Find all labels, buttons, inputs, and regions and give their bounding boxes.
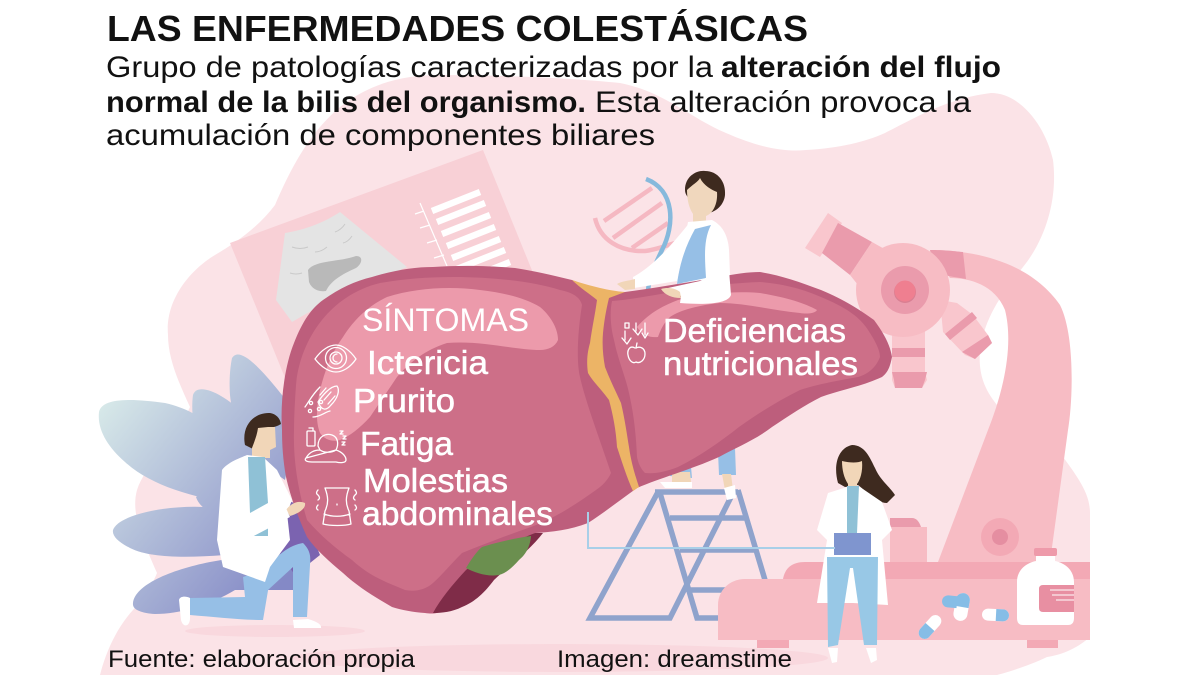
ultrasound scan [276,212,407,322]
symptom: deficiencias nutricionales [622,312,858,382]
paper sheet [230,150,540,390]
objective lenses [892,300,992,388]
symptom: deficiencias nutricionales: nutricionales [663,345,858,382]
symptom: ictericia: Ictericia [367,344,489,381]
shoes [828,648,877,663]
symptom: fatiga [305,425,454,463]
shirt [677,225,711,284]
doctor standing on ladder: body [660,448,736,500]
hand left [617,279,635,290]
face [687,178,717,226]
icon: tired person [305,428,346,463]
background blob [100,75,1090,675]
pill vertical [952,592,971,622]
symptom: molestias abdominales: abdominales [362,495,553,532]
bottle cap [1034,548,1057,556]
pill horizontal [982,608,1009,622]
left lobe [294,277,611,591]
icon: itchy hands [305,386,338,417]
icon: eye [315,345,356,372]
shoes [179,597,321,628]
leaves [99,354,320,614]
pill left [942,595,958,608]
right lobe [611,282,880,473]
source credit: Fuente: elaboración propia [108,646,416,673]
symptom: ictericia [315,344,489,381]
symptom: deficiencias nutricionales: Deficiencias [663,312,846,349]
microscope arm [930,250,1072,562]
gallbladder [466,536,531,576]
hair [685,171,725,213]
doctor with laptop [817,445,895,663]
report axis [415,203,447,266]
DNA pink strand [595,188,675,251]
ladder [590,490,765,618]
sleeve edge [240,508,290,538]
ground shadows [185,625,828,672]
liver scan silhouette [308,256,361,291]
right highlight [637,292,817,337]
intro paragraph: alteración del flujo [721,51,1001,84]
bottle [1017,548,1074,625]
symptom: fatiga: Fatiga [360,425,454,462]
microscope [718,213,1090,648]
cable [588,512,835,548]
icon: arrows and apple [622,323,648,363]
document with ultrasound [230,150,540,390]
trousers [827,557,878,647]
pill diagonal [916,613,944,641]
symptom: prurito: Prurito [353,382,455,419]
icon: abdomen [316,488,356,526]
intro paragraph: normal de la bilis del organismo. [106,86,586,119]
scan ticks [290,224,377,288]
rear leg [190,567,272,620]
symptom: molestias abdominales: Molestias [363,462,508,499]
forearm and coat edge [668,270,731,304]
doctor kneeling [179,413,321,628]
lab coat [817,487,892,605]
gallbladder shadow [433,533,543,613]
image credit: Imagen: dreamstime [557,646,792,673]
face [252,427,276,458]
left sleeve [633,222,690,288]
hand right [661,288,681,298]
intro paragraph: acumulación de componentes biliares [106,119,655,152]
shirt [847,486,859,533]
intro paragraph: Esta alteración provoca la [595,86,972,119]
liver outer rim [282,266,892,614]
bottle label [1039,585,1074,612]
DNA blue strand [646,179,670,290]
hair [244,413,281,450]
DNA helix [595,179,675,290]
left highlight [317,288,558,441]
hand [286,502,305,516]
lab coat [677,220,731,300]
report lines [432,192,510,280]
doctor top: upper body behind liver [677,171,731,300]
back hair [836,445,895,503]
front leg [263,543,310,617]
arm knob [981,518,1019,556]
doctor top: arms over liver [617,222,731,304]
laptop [834,533,871,555]
base feet [757,640,1058,648]
revolving head [856,243,950,337]
symptom: molestias abdominales [316,462,553,532]
upper base [783,562,1090,580]
shoes [660,482,736,500]
bottle body [1017,556,1074,625]
arm band [930,250,966,279]
stage block [890,518,927,563]
bile duct [572,280,639,491]
legs [665,448,736,478]
pills [916,592,1009,641]
intro paragraph: Grupo de patologías caracterizadas por la [106,51,714,84]
eyepiece [805,213,895,300]
intro paragraph [106,51,1001,152]
liver [282,266,892,614]
face [842,461,862,488]
shirt [248,457,268,536]
lab coat [217,455,292,582]
symptom: prurito [305,382,455,419]
title: LAS ENFERMEDADES COLESTÁSICAS [107,8,808,49]
feet [672,472,733,490]
symptoms heading: SÍNTOMAS [362,302,529,338]
lower base [718,579,1090,640]
